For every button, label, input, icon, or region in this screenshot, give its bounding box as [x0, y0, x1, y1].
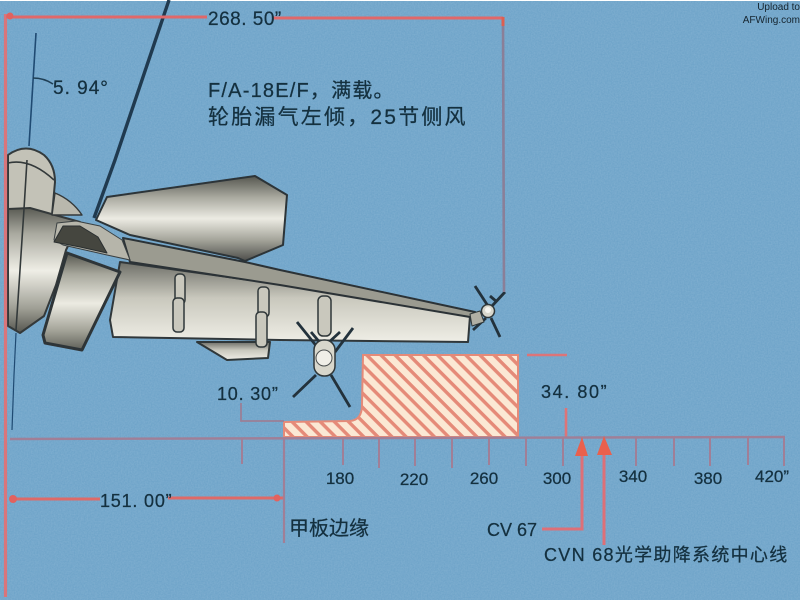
title text: aircraft condition [208, 79, 468, 129]
wing underside panel [110, 262, 470, 342]
title text: aircraft condition: 轮胎漏气左倾，25节侧风 [208, 106, 468, 129]
dimension: 34.80 inch: 34. 80” [541, 382, 608, 402]
dimension: 151.00 inch to deck edge: 151. 00” [100, 491, 172, 511]
dimension: 268.50 inch span: 268. 50” [208, 9, 282, 30]
shoulder fairing [52, 193, 82, 215]
watermark: AFWing.com [743, 15, 800, 26]
watermark: Upload to [757, 2, 800, 13]
fuselage lower body [8, 208, 80, 333]
ruler labels: 380 [694, 469, 722, 488]
pylon two [256, 287, 269, 347]
inboard fin under the wing [197, 342, 270, 360]
reference line: tilted aircraft axis [12, 33, 36, 430]
pylon three [318, 296, 331, 336]
arrow: CVN 68 optical landing system: CVN 68光学助降系统中心线 [544, 545, 789, 565]
ruler labels: 180 [326, 469, 354, 488]
ruler axis with ticks [10, 437, 785, 468]
deck obstruction hatched shape [284, 355, 518, 437]
aircraft section [8, 148, 505, 407]
dimension: datum line [4, 14, 7, 597]
arrow: CV 67: CV 67 [487, 520, 537, 540]
ruler labels: 220 [400, 470, 428, 489]
external fuel tank [96, 176, 287, 261]
ruler labels: 300 [543, 469, 571, 488]
ruler labels [326, 467, 789, 489]
dimension: 151.00 inch to deck edge [9, 491, 284, 511]
watermark [743, 2, 800, 26]
label: 5.94 degree tilt: 5. 94° [53, 78, 109, 99]
underwing missile [293, 322, 353, 407]
ruler labels: 340 [619, 467, 647, 486]
pylon one [173, 274, 185, 332]
antenna line [94, 0, 169, 218]
deck edge marker: 甲板边缘 [289, 517, 369, 540]
ruler labels: 260 [470, 469, 498, 488]
dimension: 10.30 inch: 10. 30” [217, 384, 279, 404]
fuselage dome [8, 148, 55, 215]
wheel tire [43, 253, 120, 350]
ruler labels: 420” [755, 467, 789, 486]
wheel well fairing [54, 221, 130, 260]
dimension: 268.50 inch span [6, 9, 504, 292]
title text: aircraft condition: F/A-18E/F，满载。 [208, 79, 395, 102]
dimension: 34.80 inch [527, 355, 608, 438]
wheel well dark opening [54, 226, 107, 253]
dimension: 10.30 inch [217, 384, 284, 421]
arrow: CV 67 [487, 437, 588, 540]
deck edge marker [284, 438, 369, 543]
fuselage panel lines [8, 160, 54, 330]
wing upper band [123, 238, 475, 317]
arrow: CVN 68 optical landing system [544, 436, 789, 565]
wingtip missile [470, 286, 505, 337]
